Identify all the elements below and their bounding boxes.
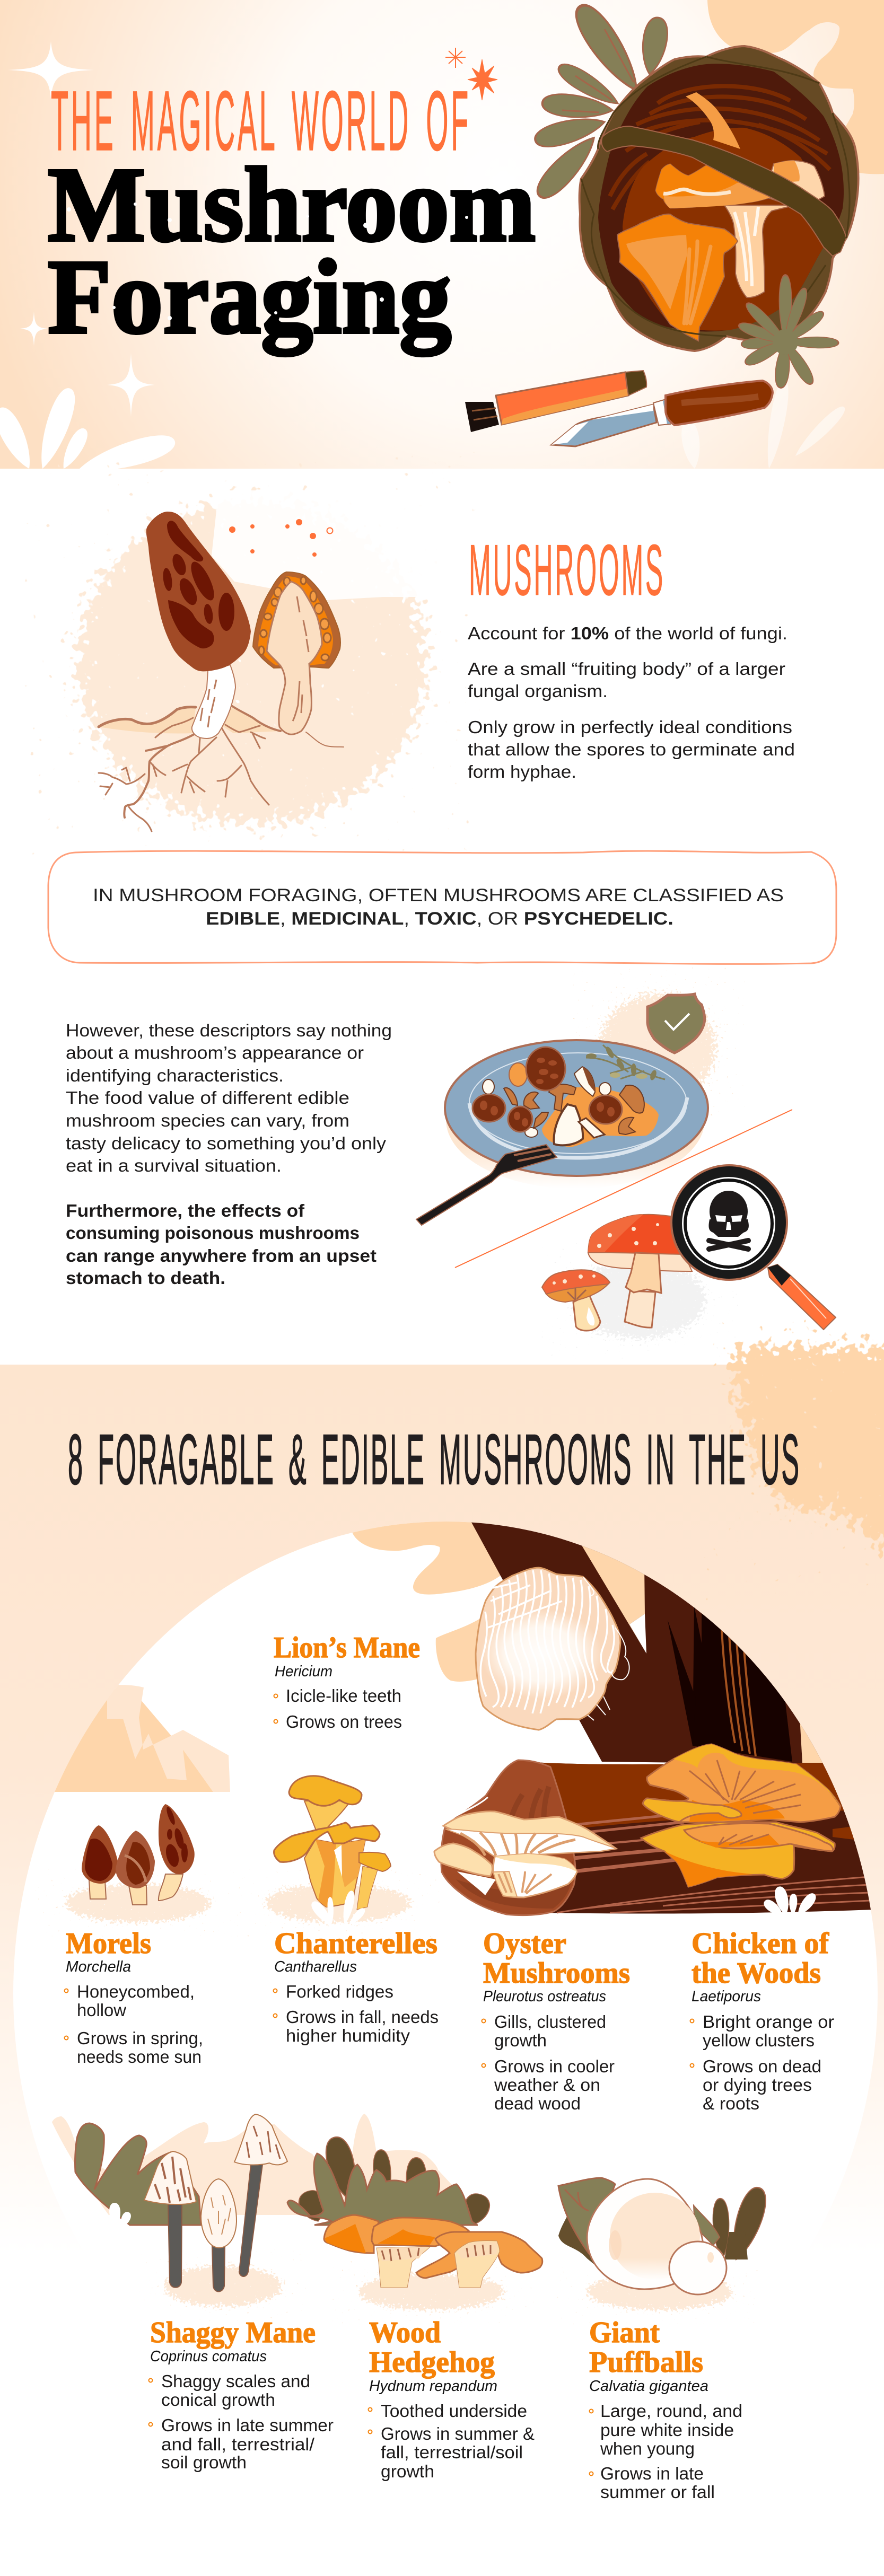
card: lion's mane text: Grows on trees [286, 1712, 402, 1731]
scene clipped to oval [45, 1514, 884, 1919]
peach blob top right [707, 0, 884, 174]
text: descriptors: However, these descriptors say nothing [66, 1021, 392, 1040]
card: wood hedgehog text: Wood [369, 2316, 441, 2349]
card: oyster mushrooms text: Mushrooms [483, 1957, 630, 1990]
card: shaggy mane text: and fall, terrestrial/ [161, 2434, 315, 2454]
icon: leaf cluster bottom right [737, 275, 838, 389]
card: chicken of the woods text: the Woods [692, 1957, 821, 1990]
card: morels text: needs some sun [77, 2047, 202, 2067]
card: wood hedgehog text [368, 2316, 535, 2481]
card: chanterelles text: Cantharellus [274, 1958, 357, 1975]
illustration: morel mushrooms [77, 490, 440, 831]
decoration: peach hills behind row two [52, 2114, 480, 2215]
card: shaggy mane text: conical growth [161, 2390, 275, 2410]
card: lion's mane text: Icicle-like teeth [286, 1686, 401, 1705]
icon: skull and crossbones [708, 1191, 749, 1249]
card: oyster mushrooms text [482, 1927, 630, 2113]
illustration: log [439, 1760, 884, 1915]
card: wood hedgehog text: Hydnum repandum [369, 2378, 497, 2395]
card: oyster mushrooms text: Gills, clustered [494, 2012, 606, 2032]
text: poison warning: stomach to death. [66, 1268, 225, 1288]
card: giant puffballs text: when young [600, 2439, 695, 2458]
title: mushroom: Mushroom [48, 146, 536, 263]
card: shaggy mane text: Shaggy Mane [150, 2316, 316, 2349]
illustration: shaggy mane [75, 2114, 287, 2306]
text: mushroom facts: that allow the spores to germinate and [468, 740, 795, 759]
card: giant puffballs text: Puffballs [589, 2346, 703, 2379]
text: poison warning: can range anywhere from an upset [66, 1246, 377, 1265]
card: giant puffballs text: pure white inside [600, 2420, 734, 2440]
card: chicken of the woods text: yellow clusters [703, 2030, 815, 2050]
callout: classification: EDIBLE , MEDICINAL , TOXIC , OR PSYCHEDELIC. [206, 909, 673, 929]
decoration: title specks [67, 203, 468, 320]
card: chanterelles text: Grows in fall, needs [286, 2007, 439, 2027]
card: giant puffballs text [589, 2316, 742, 2502]
card: shaggy mane text: Shaggy scales and [161, 2371, 310, 2391]
card: chicken of the woods text: Grows on dead [703, 2056, 821, 2076]
card: morels text: Grows in spring, [77, 2028, 203, 2048]
card: chicken of the woods text: & roots [703, 2094, 759, 2113]
text: poison warning: consuming poisonous mushrooms [66, 1223, 360, 1243]
card: shaggy mane text: soil growth [161, 2452, 247, 2472]
card: chicken of the woods text: Chicken of [692, 1927, 829, 1960]
illustration: plate of mushrooms [445, 994, 716, 1189]
card: morels text: Morchella [66, 1958, 131, 1975]
icon: fork [416, 1145, 557, 1225]
card: oyster mushrooms text: Grows in cooler [494, 2056, 615, 2076]
card: wood hedgehog text: fall, terrestrial/soil [381, 2442, 523, 2462]
card: lion's mane text [274, 1631, 420, 1731]
text: mushroom facts: fungal organism. [468, 681, 608, 701]
callout: classification: IN MUSHROOM FORAGING, OFTEN MUSHROOMS ARE CLASSIFIED AS [93, 885, 784, 905]
card: shaggy mane text: Grows in late summer [161, 2415, 334, 2435]
card: giant puffballs text: summer or fall [600, 2482, 715, 2502]
card: lion's mane text: Lion’s Mane [274, 1631, 420, 1664]
card: giant puffballs text: Calvatia gigantea [589, 2378, 708, 2395]
card: wood hedgehog text: Hedgehog [369, 2346, 495, 2379]
card: oyster mushrooms text: dead wood [494, 2094, 581, 2113]
panel: 8 foragable mushrooms [0, 1347, 884, 2576]
panel: hero [0, 0, 884, 480]
panel: mushrooms intro [48, 490, 836, 1339]
icon: orange stars [445, 48, 497, 100]
card: morels text: Honeycombed, [77, 1982, 195, 2001]
card: morels text: hollow [77, 2000, 126, 2020]
illustration: wood hedgehog [287, 2134, 542, 2310]
text: descriptors: The food value of different edible [66, 1088, 349, 1107]
text: descriptors: eat in a survival situation. [66, 1156, 282, 1175]
callout: classification [48, 851, 836, 964]
text: mushroom facts: form hyphae. [468, 762, 576, 781]
decoration: faint plant bottom right [679, 379, 848, 470]
card: morels text: Morels [66, 1927, 151, 1960]
illustration: morels [65, 1804, 211, 1922]
text: mushroom facts: Are a small “fruiting body” of a larger [468, 659, 785, 679]
card: chicken of the woods text: Laetiporus [692, 1988, 761, 2005]
decoration: log sprout [764, 1886, 816, 1913]
card: giant puffballs text: Giant [589, 2316, 660, 2349]
card: shaggy mane text [148, 2316, 334, 2472]
decoration: white plant bottom left [0, 385, 178, 480]
card: lion's mane text: Hericium [275, 1663, 332, 1680]
card: wood hedgehog text: growth [381, 2461, 434, 2481]
illustration: chanterelles [265, 1776, 411, 1928]
card: oyster mushrooms text: weather & on [494, 2075, 600, 2095]
illustration: giant puffballs [558, 2178, 771, 2310]
icon: basket with mushrooms [580, 46, 859, 351]
illustration: chicken of the woods [641, 1744, 841, 1887]
card: chicken of the woods text [690, 1927, 834, 2113]
text: descriptors: identifying characteristics. [66, 1066, 284, 1085]
divider line [455, 1110, 792, 1268]
card: chicken of the woods text: or dying trees [703, 2075, 812, 2095]
illustration: lion's mane [476, 1568, 629, 1730]
text: mushroom facts [468, 623, 795, 781]
decoration: white sparkles [8, 41, 155, 417]
text: poison warning: Furthermore, the effects of [66, 1201, 305, 1220]
card: chanterelles text [274, 1927, 439, 2045]
text: descriptors: mushroom species can vary, from [66, 1111, 349, 1130]
card: oyster mushrooms text: growth [494, 2030, 547, 2050]
text: mushroom facts: Only grow in perfectly ideal conditions [468, 717, 792, 737]
card: chanterelles text: Forked ridges [286, 1982, 393, 2001]
text: poison warning [66, 1201, 377, 1288]
icon: foraging brush [465, 371, 646, 432]
text: descriptors [66, 1021, 392, 1175]
card: giant puffballs text: Large, round, and [600, 2401, 742, 2421]
text: descriptors: tasty delicacy to something you’d only [66, 1133, 387, 1153]
text: mushroom facts: Account for 10% of the world of fungi. [468, 623, 787, 643]
card: oyster mushrooms text: Oyster [483, 1927, 566, 1960]
card: shaggy mane text: Coprinus comatus [150, 2348, 267, 2365]
card: chanterelles text: higher humidity [286, 2026, 410, 2045]
icon: leaves behind basket [531, 0, 670, 204]
card: morels text [65, 1927, 203, 2067]
illustration: mesa [45, 1685, 230, 1792]
card: chicken of the woods text: Bright orange or [703, 2012, 834, 2032]
illustration: oyster mushrooms [434, 1812, 616, 1897]
icon: foraging knife [552, 381, 773, 446]
card: chanterelles text: Chanterelles [274, 1927, 437, 1960]
card: giant puffballs text: Grows in late [600, 2464, 704, 2483]
card: wood hedgehog text: Toothed underside [381, 2401, 527, 2421]
card: oyster mushrooms text: Pleurotus ostreatus [483, 1988, 606, 2005]
text: descriptors: about a mushroom’s appearance or [66, 1043, 364, 1062]
illustration: toxic mushrooms and magnifier [542, 1165, 836, 1339]
card: wood hedgehog text: Grows in summer & [381, 2424, 535, 2443]
icon: safe shield [647, 994, 705, 1053]
title: foraging: Foraging [48, 239, 451, 356]
